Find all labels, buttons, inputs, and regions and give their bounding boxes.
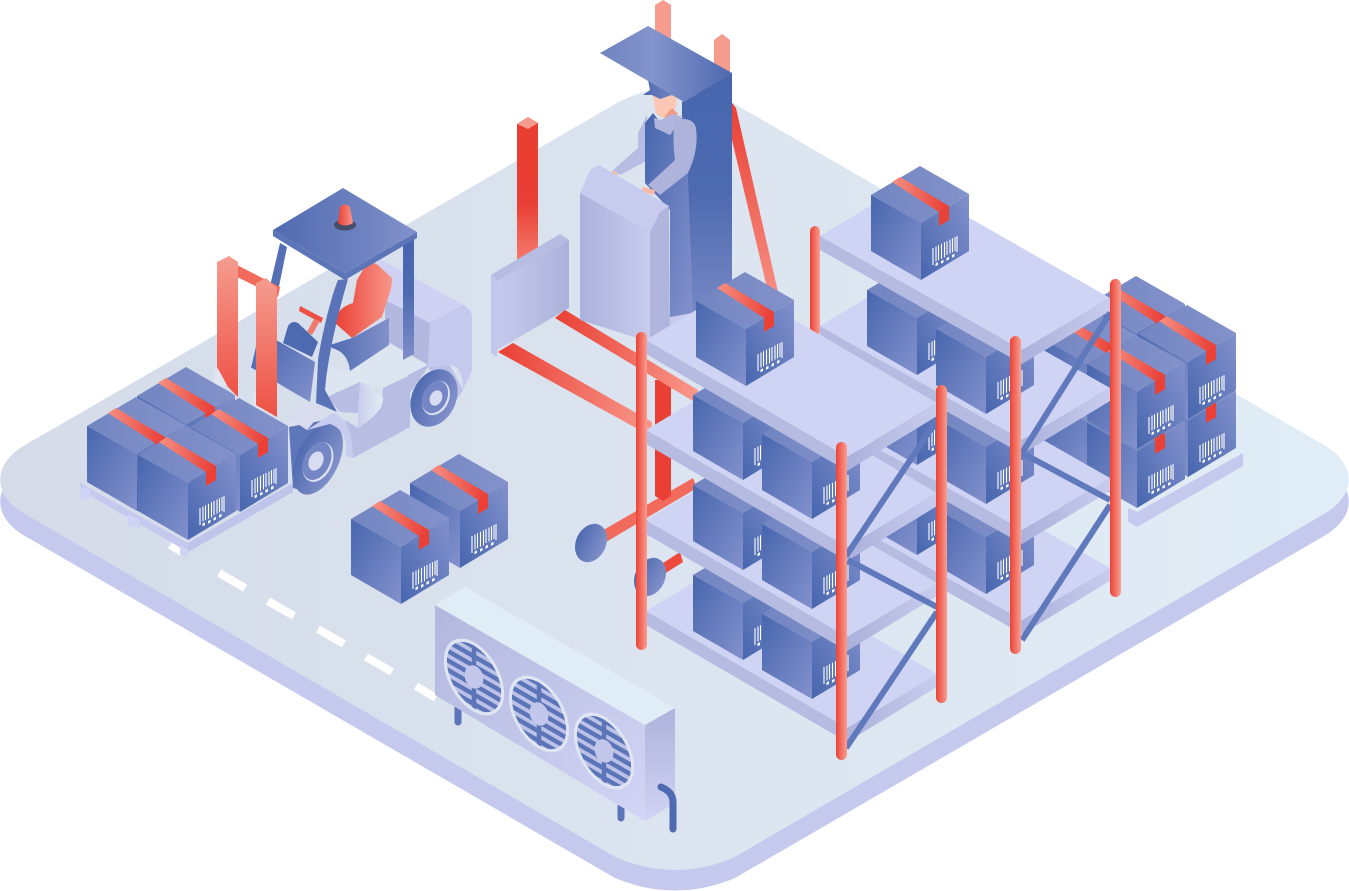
level 1 boxes — [867, 261, 1034, 414]
rear hood end — [428, 305, 472, 390]
level 2 boxes — [693, 456, 860, 609]
right pallet — [1128, 453, 1243, 527]
back rack — [810, 166, 1121, 654]
wheel right — [628, 553, 672, 601]
near arm — [648, 119, 697, 195]
lower shelf — [820, 363, 1110, 544]
forklift: seat base — [330, 318, 389, 371]
hands — [611, 170, 655, 195]
forklift: back pillars — [251, 236, 414, 370]
box on top shelf — [871, 166, 969, 280]
forklift: red seat — [335, 262, 392, 338]
pipe — [661, 787, 673, 829]
forklift: front wheel and fender — [283, 405, 353, 502]
red uprights — [636, 332, 947, 760]
level 2 boxes — [867, 351, 1034, 504]
neck shadow — [664, 108, 678, 119]
collar — [654, 114, 683, 135]
box on top shelf — [696, 272, 794, 386]
lower mast and legs — [569, 380, 697, 601]
red mast posts behind operator — [517, 0, 778, 292]
forklift: mast — [217, 256, 280, 417]
boot — [670, 313, 692, 326]
level 3 boxes — [867, 441, 1034, 594]
forklift pallet — [80, 483, 293, 558]
far arm — [613, 115, 648, 175]
middle shelf — [646, 376, 937, 561]
unit legs — [458, 700, 621, 818]
middle shelf — [820, 273, 1110, 454]
forklift: rear wheel — [401, 362, 467, 434]
wheel arch shadow — [327, 382, 360, 413]
red uprights — [810, 226, 1121, 654]
fan 2 — [496, 642, 582, 783]
control console — [580, 165, 670, 342]
fan 1 — [431, 605, 517, 746]
forklift: beacon — [334, 204, 356, 230]
operator canopy — [600, 26, 732, 102]
air conditioning unit — [431, 587, 675, 829]
floor boxes — [351, 454, 508, 604]
top shelf — [820, 183, 1110, 364]
wheel left — [569, 519, 613, 567]
rear fender patch — [428, 365, 463, 402]
forklift: body and cab — [251, 188, 472, 458]
stacked boxes on right pallet — [1038, 276, 1236, 508]
lower side body — [345, 367, 428, 458]
blue braces — [846, 420, 937, 748]
forklift: canopy — [273, 188, 417, 280]
deck — [323, 343, 428, 397]
forklift: front pillar — [316, 279, 348, 412]
forklift: dash — [252, 322, 318, 402]
forklift: carriage blocks — [214, 370, 264, 410]
rear hood top — [377, 257, 467, 323]
apron — [645, 113, 693, 317]
blue braces — [1022, 313, 1110, 640]
hood side — [385, 300, 430, 377]
forklift: steering — [299, 306, 323, 335]
floor shelf — [646, 557, 937, 742]
forks — [498, 310, 698, 434]
road markings — [170, 545, 436, 698]
level 1 boxes — [693, 366, 860, 519]
hat — [643, 80, 690, 99]
operator — [611, 80, 697, 326]
wheel arch highlight — [358, 382, 383, 428]
fan 3 — [561, 679, 647, 820]
front rack — [636, 272, 947, 760]
boxes on forklift pallet — [87, 367, 288, 540]
floor shelf — [820, 453, 1110, 634]
lower shelf — [646, 466, 937, 651]
operator column — [682, 73, 732, 340]
top shelf — [646, 286, 937, 471]
level 3 boxes — [693, 546, 860, 699]
head — [652, 92, 678, 118]
fork panel — [491, 234, 569, 357]
